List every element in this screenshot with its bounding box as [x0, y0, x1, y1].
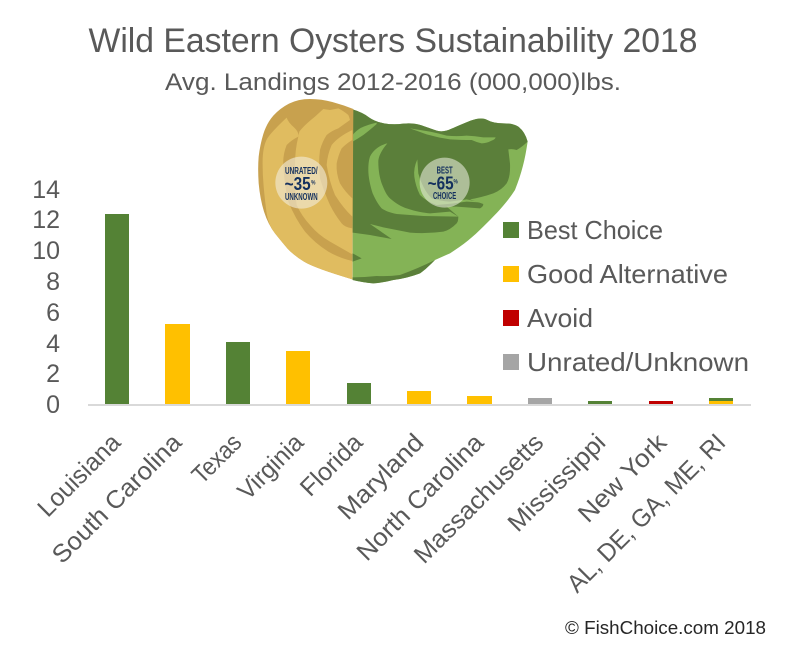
- oyster left half: [258, 99, 353, 279]
- y axis labels: 14: [32, 176, 60, 204]
- y axis labels: 0: [46, 391, 60, 419]
- category labels: Mississippi: [502, 428, 611, 537]
- y axis labels: 4: [46, 330, 60, 358]
- badge: unrated: ~35: [285, 173, 311, 194]
- y axis labels: [32, 176, 60, 419]
- legend: avoid: Avoid: [527, 303, 593, 333]
- bar chart: [88, 214, 751, 406]
- y axis labels: 10: [32, 237, 60, 265]
- icon: oyster: [258, 99, 528, 283]
- y axis labels: 12: [32, 206, 60, 234]
- badge: unrated: UNKNOWN: [285, 192, 318, 203]
- legend: unrated: Unrated/Unknown: [527, 347, 749, 377]
- badge: unrated: %: [311, 180, 316, 186]
- badge: unrated: [275, 157, 327, 209]
- category labels: Texas: [186, 428, 247, 489]
- category labels: South Carolina: [47, 428, 187, 569]
- y axis labels: 8: [46, 268, 60, 296]
- category labels: Florida: [295, 428, 368, 502]
- category labels: New York: [573, 428, 673, 528]
- category labels: North Carolina: [351, 428, 489, 566]
- badge: best choice: [420, 158, 470, 208]
- category labels: Massachusetts: [409, 428, 549, 569]
- title: Wild Eastern Oysters Sustainability 2018: [88, 22, 698, 60]
- category labels: [32, 428, 731, 598]
- category labels: Louisiana: [32, 428, 126, 522]
- oyster right half: [353, 109, 528, 283]
- badge: best choice: ~65: [428, 172, 454, 193]
- copyright: © FishChoice.com 2018: [565, 618, 766, 638]
- subtitle: Avg. Landings 2012-2016 (000,000)lbs.: [165, 69, 621, 96]
- badge: best choice: %: [453, 180, 458, 186]
- legend: best choice: Best Choice: [527, 215, 663, 245]
- badge: best choice: BEST: [437, 165, 453, 176]
- category labels: Maryland: [332, 428, 429, 525]
- y axis labels: 2: [46, 360, 60, 388]
- legend: [503, 215, 749, 377]
- y axis labels: 6: [46, 299, 60, 327]
- badge: unrated: UNRATED/: [285, 166, 318, 177]
- category labels: Virginia: [232, 428, 309, 506]
- category labels: AL, DE, GA, ME, RI: [562, 428, 731, 598]
- badge: best choice: CHOICE: [433, 191, 457, 202]
- legend: good alternative: Good Alternative: [527, 259, 728, 289]
